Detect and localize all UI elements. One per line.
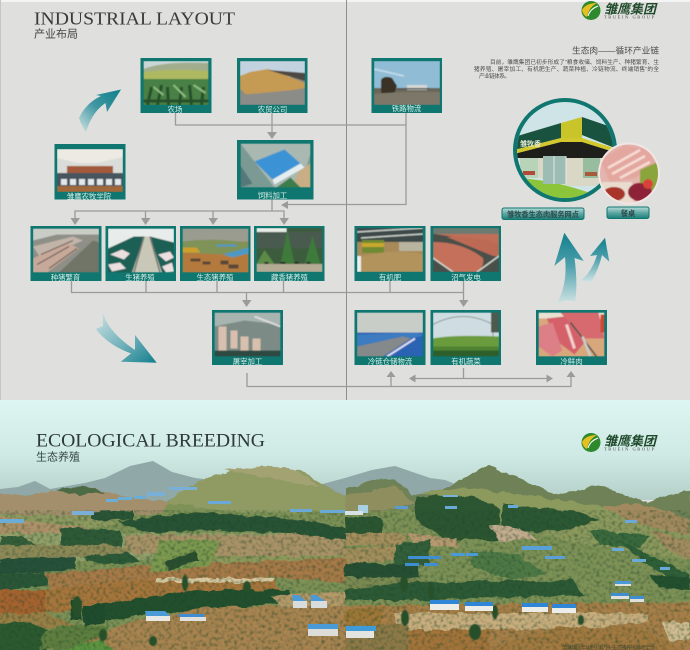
card: 农贸公司 (237, 58, 308, 114)
label: 铁路物流 (392, 104, 422, 113)
text block: intro paragraph: 目前，雏鹰集团已初步形成了“粮食收储、饲料生产、种猪繁育、生 (490, 58, 659, 66)
label: 冷链仓储物流 (368, 357, 413, 366)
label: 雏鹰农牧学院 (67, 192, 112, 201)
photo: lecture hall (57, 149, 123, 192)
photo: sow pens (33, 228, 99, 272)
text block: intro paragraph: 猪养殖、屠宰加工、有机肥生产、蔬菜种植、冷链物流、终端销售”的全 (474, 65, 659, 73)
button: 餐桌 (607, 207, 649, 218)
illustration: store circle (510, 98, 620, 205)
card: 生态猪养殖 (180, 226, 250, 282)
logo: Truein Group top: TRUEIN GROUP (604, 14, 654, 20)
card: 藏香猪养殖 (254, 226, 324, 282)
photo: fresh meat (538, 312, 604, 356)
label: 有机蔬菜 (451, 357, 481, 366)
photo: biogas bags (433, 228, 499, 272)
far mountains (0, 461, 470, 510)
photo: feed factory aerial (240, 144, 310, 188)
connector lines and arrows (70, 113, 576, 386)
button: 雏牧香生态肉服务网点 (502, 208, 584, 220)
card: 农场 (140, 58, 212, 114)
arrow: small up teal (580, 238, 609, 283)
label: 有机肥 (379, 273, 402, 282)
label: 农场 (168, 105, 182, 114)
photo: rail freight (374, 61, 440, 105)
card: 冷鲜肉 (536, 310, 607, 366)
tree texture (0, 510, 690, 650)
title: industrial layout (34, 8, 235, 40)
photo: cold storage (357, 312, 423, 356)
title: ecological breeding (36, 432, 265, 464)
photo: corn field (144, 61, 208, 105)
label: 生态猪养殖 (197, 273, 234, 282)
label: 冷鲜肉 (560, 357, 583, 366)
button: 餐桌: 餐桌 (621, 209, 635, 218)
button: 雏牧香生态肉服务网点: 雏牧香生态肉服务网点 (507, 210, 579, 219)
arrow: big up teal (554, 233, 584, 305)
label: 饲料加工 (258, 191, 288, 200)
logo: Truein Group lower: TRUEIN GROUP (604, 446, 654, 452)
illustration: store circle: 雏牧香 (520, 139, 541, 148)
illustration: meat platter circle (598, 142, 662, 204)
text block: intro paragraph (474, 58, 659, 80)
card: 种猪繁育 (30, 226, 102, 282)
photo: tibetan pigs forest (256, 228, 322, 272)
blue roof farm buildings (0, 487, 670, 638)
title: industrial layout: 产业布局 (34, 26, 78, 40)
card: 冷链仓储物流 (354, 310, 426, 366)
card: 铁路物流 (372, 58, 442, 113)
label: 屠宰加工 (233, 357, 263, 366)
trees (72, 574, 584, 646)
card: 沼气发电 (430, 226, 501, 282)
label: 沼气发电 (451, 273, 481, 282)
sky (0, 400, 690, 500)
heading: eco meat circular chain: 生态肉——循环产业链 (572, 44, 659, 56)
card: 有机肥 (354, 226, 426, 282)
arrow: up right teal (79, 90, 121, 132)
label: 藏香猪养殖 (271, 273, 309, 282)
label: 种猪繁育 (51, 273, 80, 282)
card: 有机蔬菜 (430, 310, 501, 366)
card: 雏鹰农牧学院 (54, 144, 126, 201)
photo: pig barn (108, 228, 174, 272)
logo: Truein Group top (582, 1, 658, 20)
card: 饲料加工 (237, 140, 314, 200)
photo: slaughter line (214, 312, 280, 356)
title: industrial layout: INDUSTRIAL LAYOUT (34, 8, 235, 28)
title: ecological breeding: ECOLOGICAL BREEDING (36, 432, 265, 452)
panel: industrial layout background (0, 0, 690, 401)
card: 屠宰加工 (212, 310, 283, 366)
photo: ecological pig range (182, 228, 248, 272)
panel: ecological breeding photo (0, 400, 690, 650)
terrain (0, 465, 690, 650)
text block: intro paragraph: 产业链体系。 (479, 72, 510, 80)
logo: Truein Group lower (582, 433, 658, 452)
photo: greenhouse (433, 312, 499, 356)
photo: compost shed (357, 228, 423, 272)
arrow: down right teal (96, 312, 157, 363)
photo: grain pile (240, 61, 305, 105)
label: 生猪养殖 (125, 273, 155, 282)
title: ecological breeding: 生态养殖 (36, 450, 80, 464)
card: 生猪养殖 (106, 226, 176, 282)
logo: Truein Group top: 雏鹰集团 (604, 2, 658, 16)
logo: Truein Group lower: 雏鹰集团 (604, 434, 658, 448)
label: 农贸公司 (258, 105, 287, 114)
